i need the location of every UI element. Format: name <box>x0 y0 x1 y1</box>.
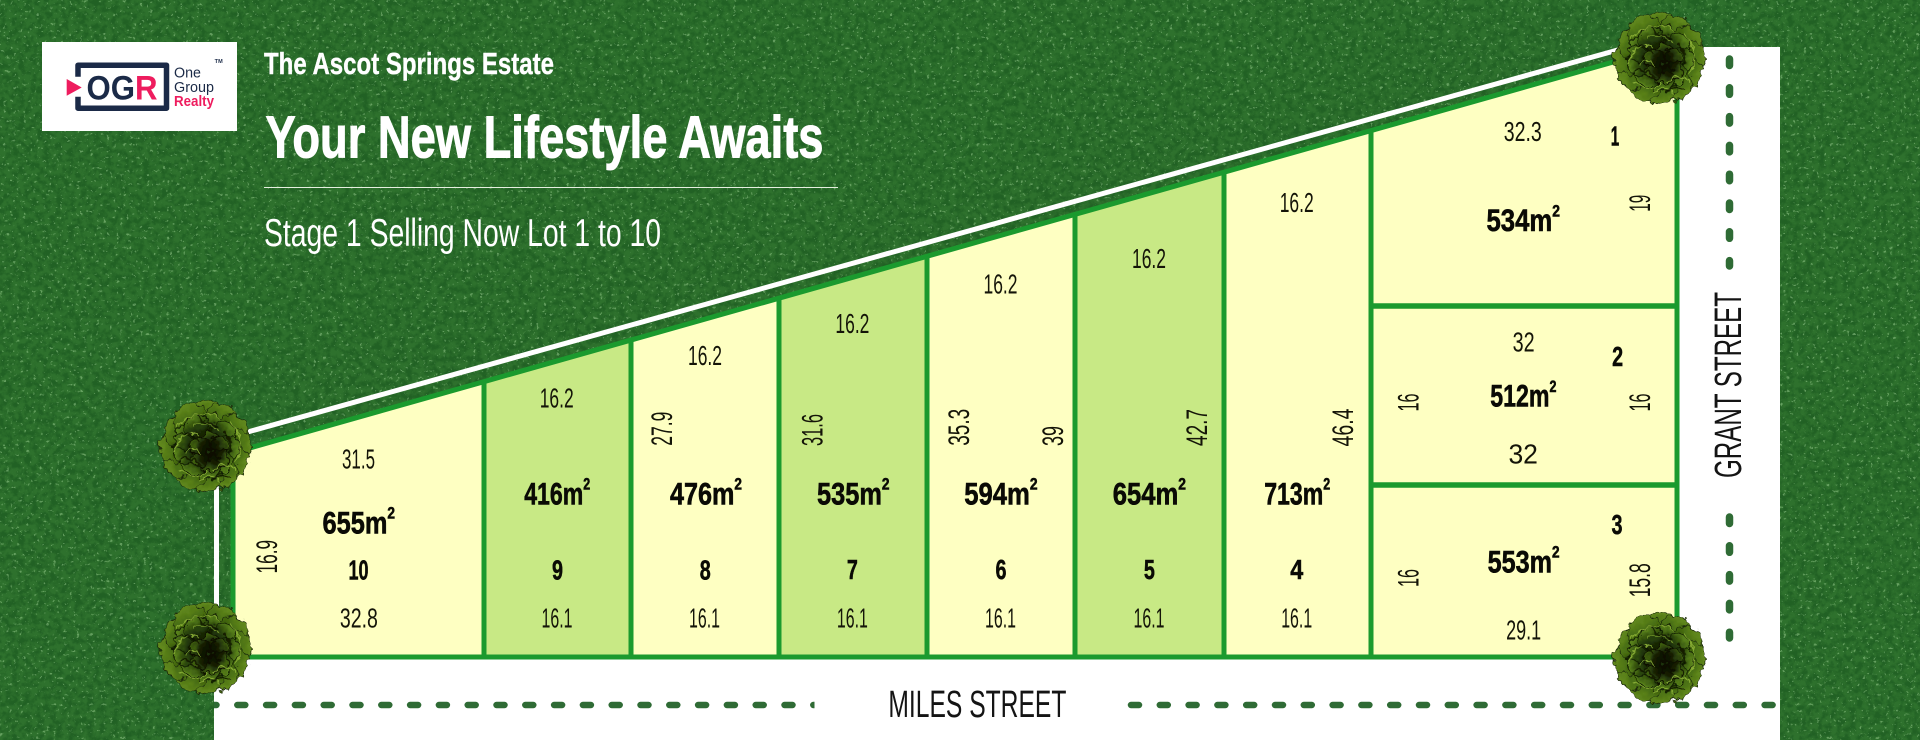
street name: Miles Street: MILES STREET <box>888 684 1066 726</box>
lot 5: 16.2 <box>1132 243 1166 274</box>
lot 2: 2 <box>1612 341 1623 372</box>
lot 4: 16.2 <box>1280 187 1314 218</box>
lot 4 <box>1224 131 1371 657</box>
lot 8: 16.1 <box>689 602 720 633</box>
lot 9: 9 <box>552 554 563 585</box>
lot 9: 2 <box>583 475 590 494</box>
logo wordmark: Realty <box>174 93 215 110</box>
road: Miles Street and Grant Street pavement <box>214 47 1780 740</box>
lot 1: 19 <box>1624 195 1657 212</box>
tree: bottom right corner <box>1612 610 1708 706</box>
trademark mark: TM <box>215 59 223 65</box>
road centre dashes: Miles Street <box>208 702 1775 708</box>
logo wordmark: Group <box>174 79 214 96</box>
stage subheading: Stage 1 Selling Now Lot 1 to 10 <box>264 212 661 255</box>
lot 5: 654m <box>1113 475 1193 511</box>
tree: lower left corner <box>158 600 254 696</box>
lot 2: 32 <box>1508 438 1538 469</box>
lot 6: 16.1 <box>985 602 1016 633</box>
lot 4: 713m <box>1264 475 1345 511</box>
lot 8: 16.2 <box>688 340 722 371</box>
lot 9: 416m <box>524 475 605 511</box>
lot 10: 16.9 <box>251 540 284 573</box>
lot 5: 16.1 <box>1134 602 1164 633</box>
lot 8: 476m <box>670 475 751 511</box>
lot 7 <box>779 256 927 657</box>
lot 1: 1 <box>1611 121 1619 152</box>
lot 6: 6 <box>996 554 1006 585</box>
lot 7: 535m <box>817 475 898 511</box>
lot 5 <box>1075 172 1224 657</box>
logo frame <box>78 65 166 108</box>
lot 1 <box>1371 44 1677 306</box>
lot 3: 553m <box>1488 543 1568 579</box>
lot 3: 29.1 <box>1506 614 1541 645</box>
lot 8: 27.9 <box>646 412 679 446</box>
logo play arrow <box>67 79 82 96</box>
lot 6: 35.3 <box>943 409 976 446</box>
lot 7: 2 <box>882 475 890 494</box>
estate name: The Ascot Springs Estate <box>264 46 554 81</box>
lot 9 <box>484 340 631 657</box>
lot 4: 2 <box>1323 475 1330 494</box>
lot 1: 534m <box>1486 202 1567 238</box>
estate lots <box>233 44 1677 657</box>
lot 10: 2 <box>387 504 395 523</box>
lot 6 <box>927 214 1075 657</box>
lot 8: 8 <box>700 554 711 585</box>
lot 2: 32 <box>1513 327 1535 358</box>
lot 5: 2 <box>1178 475 1186 494</box>
lot 7: 16.1 <box>837 602 868 633</box>
lot 8: 2 <box>734 475 742 494</box>
lot 7: 16.2 <box>835 308 869 339</box>
logo wordmark: One <box>174 65 201 82</box>
lot 7: 7 <box>847 554 858 585</box>
lot 10: 32.8 <box>340 602 378 633</box>
lot boundary lines <box>230 44 1677 660</box>
lot 3 <box>1371 485 1677 657</box>
lot 5: 5 <box>1144 554 1155 585</box>
lot 9: 16.1 <box>542 602 572 633</box>
lot 3: 3 <box>1612 509 1622 540</box>
lot 4: 46.4 <box>1327 408 1360 446</box>
logo wordmark <box>174 65 215 110</box>
lot 10: 10 <box>348 554 368 585</box>
tree: top right corner <box>1612 10 1708 106</box>
lot 10: 31.5 <box>342 443 375 474</box>
road centre dashes: Grant Street <box>1726 59 1733 638</box>
lot 5: 42.7 <box>1181 409 1214 446</box>
lot 8 <box>631 298 779 657</box>
white boundary line <box>206 41 1650 657</box>
lot 3: 15.8 <box>1624 563 1657 597</box>
lot 1: 32.3 <box>1504 116 1542 147</box>
logo OGR letters: OGR <box>86 69 158 107</box>
lot 6: 39 <box>1037 426 1070 446</box>
lot 1: 2 <box>1552 201 1560 220</box>
lot 3: 16 <box>1392 569 1425 587</box>
lot 2: 2 <box>1550 377 1556 396</box>
lot 2: 512m <box>1490 378 1571 414</box>
lot 2: 16 <box>1624 394 1657 412</box>
lot 2: 16 <box>1392 394 1425 412</box>
lot 3: 2 <box>1552 543 1560 562</box>
logo: One Group Realty <box>42 42 237 131</box>
lot 6: 594m <box>964 475 1045 511</box>
lot 9: 16.2 <box>540 382 574 413</box>
lot 2 <box>1371 306 1677 485</box>
lot 6: 2 <box>1030 475 1038 494</box>
tree: upper left corner <box>158 398 254 494</box>
main heading: Your New Lifestyle Awaits <box>266 104 824 170</box>
lot 10: 655m <box>322 504 403 540</box>
lot 7: 31.6 <box>797 414 830 446</box>
street name: Grant Street: GRANT STREET <box>1708 292 1750 478</box>
lot 4: 4 <box>1290 554 1304 585</box>
lot 6: 16.2 <box>984 269 1018 300</box>
lot 10 <box>233 382 484 657</box>
lot 4: 16.1 <box>1281 602 1312 633</box>
